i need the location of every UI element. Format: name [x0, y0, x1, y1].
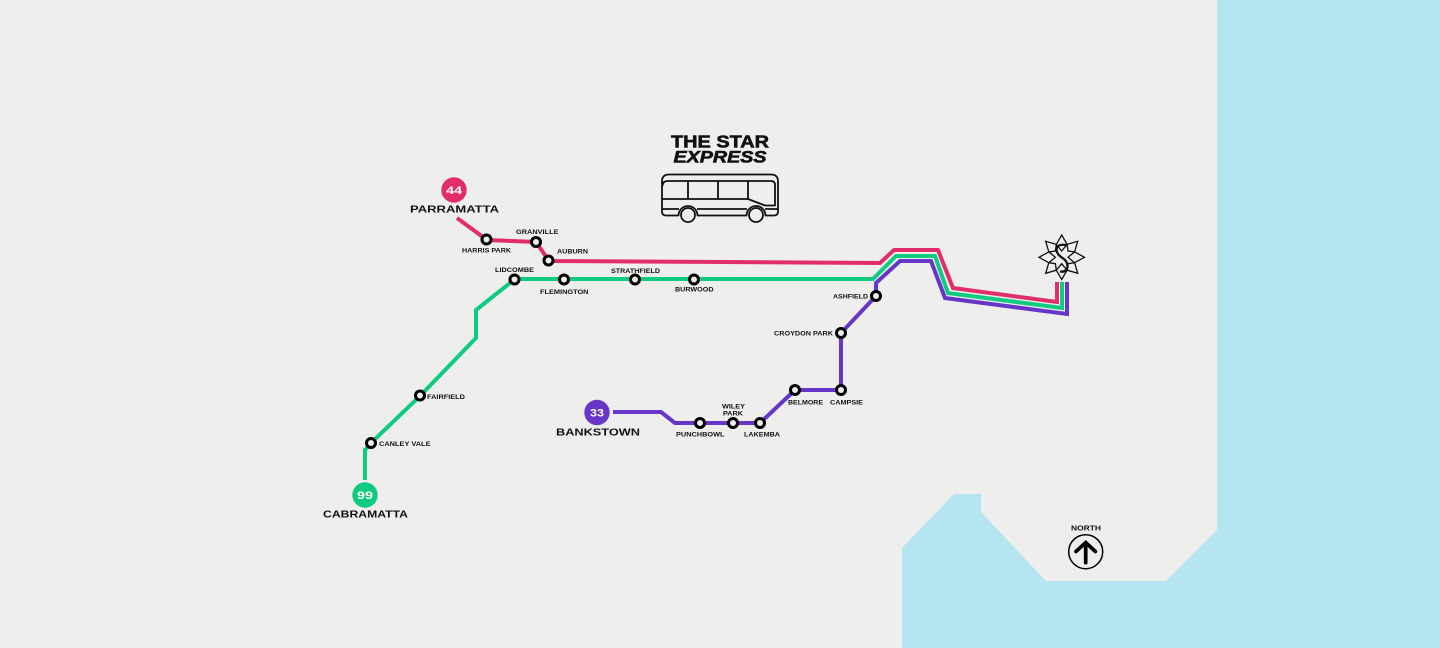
stations: green line — [366, 275, 698, 448]
water area — [902, 0, 1440, 648]
station labels: PARK — [723, 410, 743, 418]
destination: Parramatta: PARRAMATTA — [410, 204, 500, 216]
title: EXPRESS — [674, 147, 767, 166]
station labels: STRATHFIELD — [611, 268, 660, 275]
title — [671, 132, 769, 166]
badge: route 33: 33 — [590, 408, 604, 420]
station labels: CROYDON PARK — [774, 330, 833, 338]
station labels: GRANVILLE — [516, 229, 559, 236]
icon: star logo — [1039, 235, 1084, 280]
line: green route 99 — [365, 256, 1062, 480]
station labels: CANLEY VALE — [379, 441, 431, 448]
station labels: AUBURN — [557, 248, 588, 256]
station labels: ASHFIELD — [833, 294, 868, 300]
badge: route 99 — [352, 482, 378, 508]
north label: NORTH — [1071, 526, 1101, 533]
station labels: BURWOOD — [675, 286, 714, 294]
station labels: HARRIS PARK — [462, 247, 511, 254]
station labels — [379, 229, 868, 448]
station labels: BELMORE — [788, 400, 824, 406]
badge: route 99: 99 — [357, 490, 373, 502]
badge: route 33 — [584, 400, 610, 425]
station labels: CAMPSIE — [830, 400, 864, 406]
station labels: PUNCHBOWL — [676, 432, 725, 438]
station labels: WILEY — [722, 404, 746, 410]
icon: bus — [662, 174, 778, 222]
destination: Cabramatta: CABRAMATTA — [323, 510, 409, 521]
line: pink route 44 — [457, 218, 1057, 302]
station labels: FAIRFIELD — [427, 394, 465, 401]
stations: purple line — [696, 292, 880, 428]
station labels: LIDCOMBE — [495, 267, 535, 274]
station labels: FLEMINGTON — [540, 289, 589, 296]
destination: Bankstown: BANKSTOWN — [556, 428, 640, 438]
icon: north arrow — [1069, 535, 1103, 569]
badge: route 44: 44 — [446, 185, 463, 197]
title: THE STAR — [671, 132, 769, 152]
line: purple route 33 — [613, 261, 1067, 423]
station labels: LAKEMBA — [744, 432, 780, 438]
stations: pink line — [482, 235, 553, 265]
badge: route 44 — [441, 177, 467, 203]
